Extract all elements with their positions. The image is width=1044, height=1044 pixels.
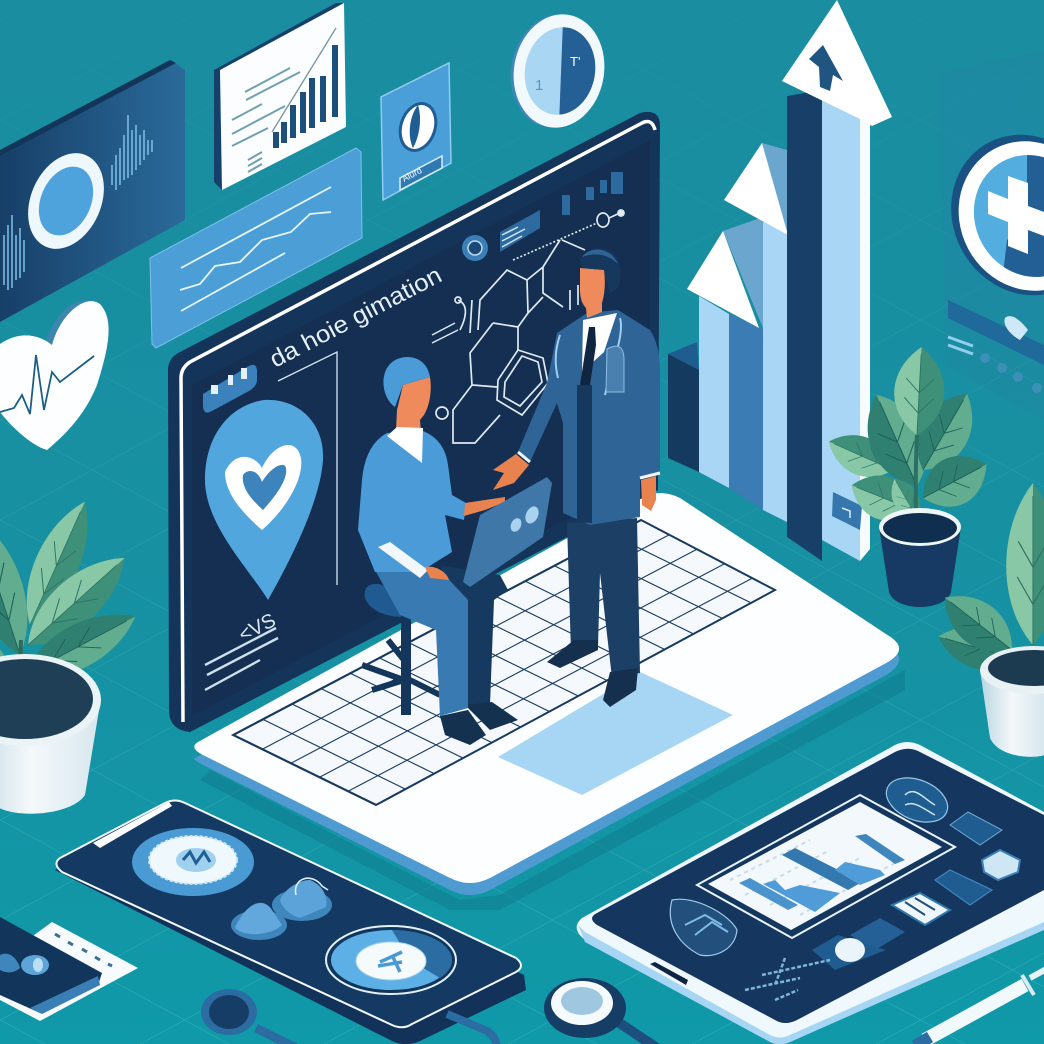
- icon: heart with ECG: [0, 300, 109, 450]
- shirt: [582, 313, 617, 372]
- syringe: [915, 967, 1044, 1044]
- trousers: [567, 518, 640, 678]
- scrubs top: [358, 431, 466, 572]
- screen: footer text: <VS: [235, 609, 279, 646]
- arrow: medium: [724, 143, 788, 522]
- bar: dark base block: [668, 342, 699, 472]
- seal badge: [132, 828, 254, 896]
- tablet home button: [650, 962, 688, 985]
- icon: split circle gauge: 1: [535, 77, 543, 94]
- hair: [580, 248, 620, 293]
- screen: molecule diagram: [432, 210, 624, 443]
- far shoe: [465, 702, 518, 730]
- arrow chart: [668, 0, 892, 561]
- plant: right pot: [821, 346, 998, 607]
- arm hand: [464, 497, 505, 516]
- neck and face: [580, 268, 605, 318]
- coat: [518, 310, 660, 525]
- coat centre dark: [577, 385, 592, 523]
- arrow: tall: [782, 0, 892, 561]
- tablet: [577, 742, 1044, 1044]
- panel: line chart: [150, 148, 362, 348]
- small laptop: [463, 477, 552, 587]
- icon: blue badge card: [381, 63, 451, 200]
- near leg: [375, 570, 468, 716]
- phone: [55, 800, 526, 1044]
- icon: small tag: [832, 492, 862, 530]
- tablet icons: [670, 769, 1020, 1000]
- stethoscope: chest piece right: [544, 978, 660, 1044]
- laptop shadow: [200, 670, 905, 910]
- tie: [580, 327, 596, 385]
- leaves: [932, 483, 1044, 680]
- sleeve cuff: [378, 542, 428, 578]
- tablet chart screen: [697, 795, 955, 938]
- icon: blue badge card: Alurd: [400, 165, 423, 184]
- nurse seated: [358, 357, 552, 745]
- screen: heart location pin: [205, 400, 323, 600]
- stool: [362, 584, 440, 715]
- stethoscope: chest piece left: [201, 989, 497, 1044]
- plant: bottom right pot: [932, 483, 1044, 757]
- surgical cap: [383, 357, 430, 407]
- collar: [387, 427, 423, 463]
- laptop screen: [168, 112, 660, 732]
- panel: white growth chart card: [214, 3, 346, 190]
- screen: footer text: [205, 609, 279, 690]
- laptop: [168, 112, 905, 910]
- hands: [493, 454, 656, 511]
- neck and face: [396, 377, 431, 435]
- icon: split circle gauge: [510, 14, 604, 128]
- leaves: [821, 346, 998, 530]
- lap hand: [425, 567, 449, 580]
- near shoe: [440, 710, 486, 745]
- icon: split circle gauge: T': [570, 54, 580, 69]
- touchpad: [498, 672, 733, 795]
- stethoscope: [556, 318, 621, 395]
- leaves: [0, 493, 146, 705]
- laptop base: [194, 493, 899, 895]
- arrow: small: [687, 217, 763, 510]
- screen heading: da hoie gimation: [265, 262, 446, 373]
- panel: waveform dashboard: [0, 60, 185, 322]
- cuffs: [518, 452, 660, 478]
- shoes: [547, 640, 638, 707]
- panel: medical cross display: [948, 134, 1044, 393]
- screen: top icons: [462, 172, 623, 261]
- keyboard: [233, 520, 775, 805]
- screen: left column frame: [278, 352, 337, 585]
- dial: [326, 926, 456, 994]
- plant: left pot: [0, 493, 146, 814]
- far leg: [440, 565, 508, 705]
- doctor standing: [493, 248, 660, 707]
- pocket: [606, 346, 624, 392]
- earbud shapes: [231, 878, 332, 940]
- phone notch: [93, 802, 172, 848]
- screen: pill chip: [203, 365, 257, 413]
- small device: [0, 917, 138, 1021]
